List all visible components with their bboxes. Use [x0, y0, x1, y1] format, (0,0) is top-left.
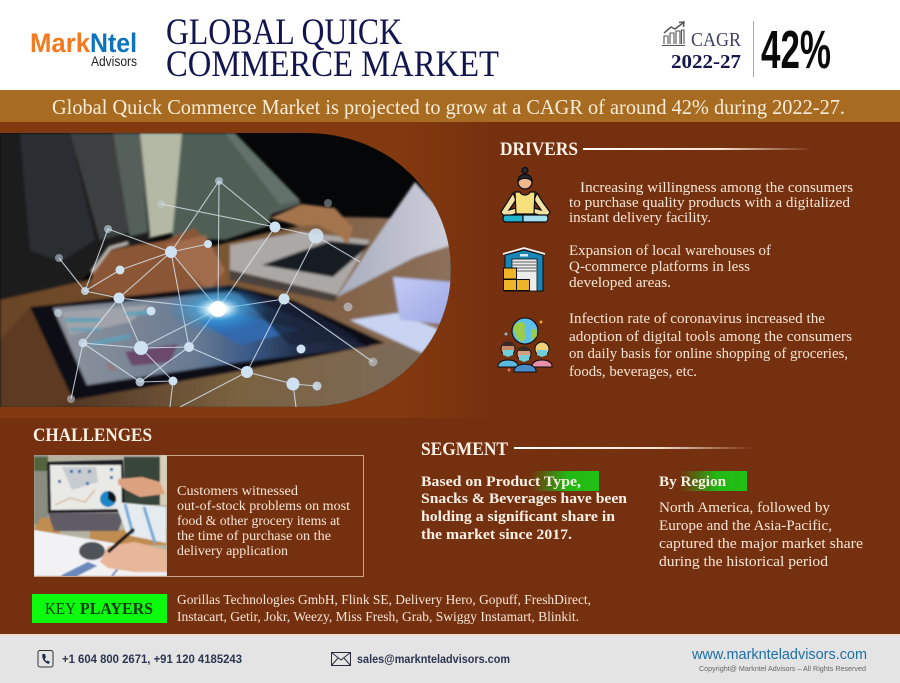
segment: by region: captured the major market share	[659, 536, 863, 552]
driver text 1: Increasing willingness among the consumers	[580, 180, 853, 196]
driver text 2: developed areas.	[569, 275, 671, 291]
key players list: Gorillas Technologies GmbH, Flink SE, Delivery Hero, Gopuff, FreshDirect,	[177, 592, 591, 607]
laptop base	[230, 232, 370, 295]
logo: Ntel	[90, 28, 137, 58]
logo	[30, 28, 137, 69]
CAGR label: CAGR	[691, 29, 742, 51]
segment heading: SEGMENT	[421, 439, 508, 460]
network nodes	[54, 177, 378, 403]
icon: globe and masked people	[498, 318, 552, 372]
phone numbers: +1 604 800 2671, +91 120 4185243	[62, 654, 242, 666]
key players badge: PLAYERS	[80, 599, 153, 618]
tablet	[30, 285, 385, 400]
driver text 3: Infection rate of coronavirus increased the	[569, 311, 825, 327]
key players list	[177, 592, 591, 624]
subtitle banner	[0, 90, 900, 122]
segment: product type	[421, 471, 627, 543]
CAGR value: 42%	[761, 20, 831, 80]
header band	[0, 0, 900, 90]
title: GLOBAL QUICK	[166, 12, 402, 53]
segment: by region	[659, 471, 863, 570]
challenges photo	[34, 455, 167, 576]
logo: Advisors	[91, 54, 137, 69]
driver text 3: adoption of digital tools among the consumers	[569, 329, 852, 345]
segment: by region: North America, followed by	[659, 500, 831, 516]
driver text 3	[569, 311, 852, 380]
segment: by region: By Region	[659, 474, 726, 490]
footer	[0, 634, 900, 683]
driver text 1: instant delivery facility.	[569, 210, 711, 226]
right hand	[270, 204, 353, 244]
hero photo: laptop, tablet and network	[0, 133, 452, 408]
challenges text: Customers witnessed	[177, 483, 298, 498]
driver text 1	[569, 180, 853, 226]
icon: envelope	[332, 652, 350, 666]
lighter backing behind photo	[0, 122, 500, 418]
key players badge	[32, 594, 167, 623]
papers	[350, 313, 440, 353]
CAGR label: 2022-27	[671, 51, 741, 73]
challenges text: food & other grocery items at	[177, 513, 340, 528]
subtitle banner: Global Quick Commerce Market is projected to grow at a CAGR of around 42% during 2022-27.	[52, 95, 845, 119]
icon: phone	[38, 650, 53, 667]
icon: warehouse	[503, 248, 545, 291]
driver text 1: to purchase quality products with a digitalized	[569, 195, 851, 211]
segment: product type: the market since 2017.	[421, 527, 572, 543]
driver text 2	[569, 243, 771, 291]
copyright: Copyright@ Markntel Advisors – All Rights Reserved	[699, 664, 866, 673]
left hand	[92, 228, 226, 300]
website: www.marknteladvisors.com	[691, 646, 867, 663]
network lines	[59, 181, 373, 407]
driver text 2: Q-commerce platforms in less	[569, 259, 750, 275]
driver text 2: Expansion of local warehouses of	[569, 243, 771, 259]
challenges text	[177, 483, 350, 558]
challenges text: delivery application	[177, 543, 288, 558]
key players badge: KEY	[45, 599, 76, 618]
title: COMMERCE MARKET	[166, 44, 499, 85]
segment: product type: Snacks & Beverages have been	[421, 491, 627, 507]
logo: Mark	[30, 28, 91, 58]
challenges text: out-of-stock problems on most	[177, 498, 350, 513]
jacket	[0, 133, 150, 300]
light burst	[170, 284, 267, 332]
segment: by region: during the historical period	[659, 554, 829, 570]
laptop screen	[337, 182, 452, 297]
drivers heading: DRIVERS	[500, 139, 578, 160]
challenges heading: CHALLENGES	[33, 425, 152, 446]
driver text 3: foods, beverages, etc.	[569, 364, 697, 380]
icon: meditating person	[501, 168, 550, 222]
table	[0, 215, 451, 398]
segment: by region: Europe and the Asia-Pacific,	[659, 518, 832, 534]
icon: growth chart	[662, 22, 685, 46]
key players list: Instacart, Getir, Jokr, Weezy, Miss Fresh, Grab, Swiggy Instamart, Blinkit.	[177, 609, 579, 624]
challenges text: the time of purchase on the	[177, 528, 331, 543]
email: sales@marknteladvisors.com	[357, 654, 510, 666]
driver text 3: on daily basis for online shopping of groceries,	[569, 346, 848, 362]
segment: product type: Based on Product Type,	[421, 474, 581, 490]
CAGR label	[671, 29, 742, 73]
title	[166, 12, 499, 85]
segment: product type: holding a significant share in	[421, 509, 615, 525]
challenges panel	[34, 455, 364, 576]
